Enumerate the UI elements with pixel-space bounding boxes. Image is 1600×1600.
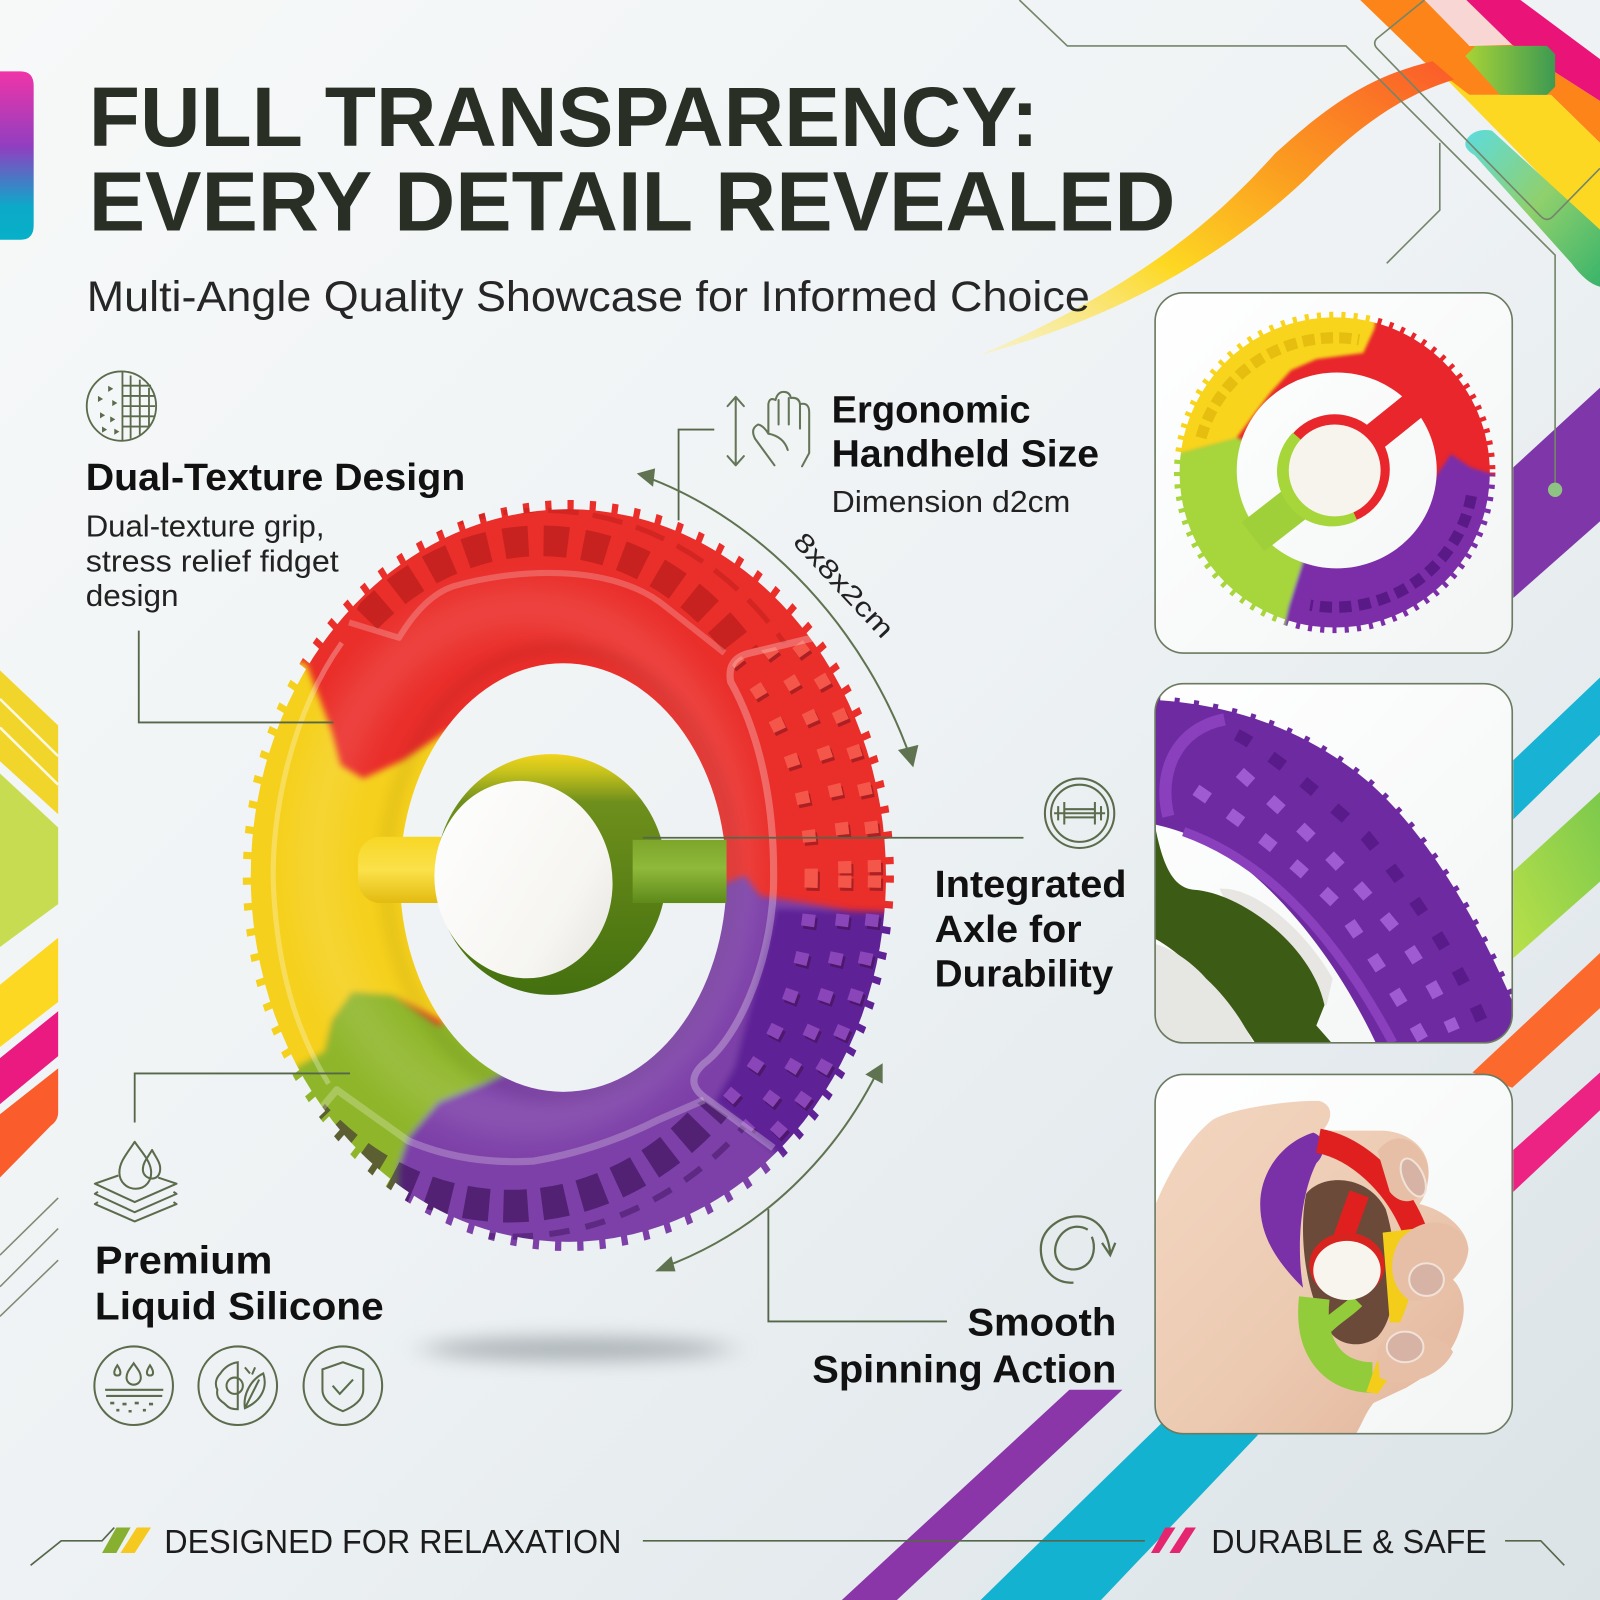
heading bbox=[812, 1302, 1116, 1392]
icon: waterproof bbox=[94, 1346, 173, 1425]
description: stress relief fidget bbox=[86, 544, 339, 578]
dimension text: Dimension d2cm bbox=[832, 485, 1070, 519]
heading: Ergonomic bbox=[832, 388, 1031, 430]
heading: Liquid Silicone bbox=[95, 1285, 384, 1328]
callout: premium liquid silicone bbox=[94, 1142, 384, 1425]
raised rim contours bbox=[273, 573, 813, 1162]
toy: yellow section bbox=[1382, 1228, 1414, 1322]
right tread bumps bbox=[723, 640, 884, 1142]
icon: shield bbox=[304, 1346, 382, 1425]
icon: gear and leaf bbox=[198, 1346, 277, 1425]
heading: Smooth bbox=[967, 1302, 1116, 1345]
panel: tread close-up bbox=[1155, 684, 1520, 1051]
title: FULL TRANSPARENCY: bbox=[89, 69, 1039, 164]
ribbons: left side bbox=[0, 670, 58, 1316]
main product: silicone ring bbox=[242, 500, 894, 1251]
top and bottom windows bbox=[357, 508, 787, 650]
footer: durable and safe bbox=[1151, 1524, 1564, 1565]
heading: Dual-Texture Design bbox=[86, 456, 465, 498]
tread bumps bbox=[1196, 735, 1482, 1041]
panel: toy in hand bbox=[1155, 1074, 1512, 1434]
footer: designed for relaxation bbox=[31, 1524, 621, 1565]
callout: dual texture design bbox=[86, 371, 465, 613]
finger nails bbox=[1400, 1158, 1427, 1198]
heading: Axle for bbox=[935, 908, 1082, 950]
palm hollow bbox=[1303, 1180, 1395, 1344]
ribbons: bottom bbox=[842, 1390, 1258, 1600]
title bbox=[89, 69, 1176, 249]
left gradient tab bbox=[0, 71, 34, 240]
white cap back bbox=[1219, 889, 1333, 1005]
white cap front bbox=[1155, 944, 1253, 1043]
footer: designed for relaxation: DESIGNED FOR RELAXATION bbox=[164, 1524, 621, 1561]
subtitle: Multi-Angle Quality Showcase for Informed Choice bbox=[87, 273, 1090, 321]
description bbox=[86, 510, 339, 613]
ribbons: top right bbox=[1360, 0, 1600, 287]
purple tread bbox=[1155, 700, 1520, 1051]
heading: Spinning Action bbox=[812, 1349, 1116, 1392]
toy: purple section bbox=[1260, 1133, 1324, 1288]
surface shading bbox=[317, 607, 736, 1117]
icon: drops on layers bbox=[95, 1142, 177, 1221]
description: Dual-texture grip, bbox=[86, 510, 324, 544]
small ring bbox=[1174, 312, 1496, 634]
dimension arcs bbox=[637, 468, 918, 1271]
hand bbox=[1156, 1101, 1468, 1434]
icon: dual texture bbox=[87, 371, 156, 441]
heading: Durability bbox=[935, 953, 1113, 995]
icon: axle bbox=[1045, 779, 1114, 848]
circuit lines bbox=[1019, 0, 1600, 497]
heading: Handheld Size bbox=[832, 432, 1099, 474]
heading bbox=[95, 1239, 384, 1328]
heading bbox=[935, 863, 1127, 995]
icon: spin bbox=[1041, 1216, 1115, 1283]
toy: hub bbox=[1309, 1234, 1385, 1289]
panel: full ring view bbox=[1153, 293, 1512, 653]
orange to yellow swoosh bbox=[980, 61, 1454, 355]
toy: red section bbox=[1318, 1141, 1414, 1230]
small ring spokes and hub bbox=[1253, 480, 1327, 537]
description: design bbox=[86, 579, 179, 613]
floor shadow bbox=[423, 1337, 730, 1361]
callout: leader lines bbox=[135, 430, 1023, 1321]
ribbons: right side bbox=[1472, 388, 1600, 1192]
hub back bbox=[436, 754, 666, 995]
icon: hand and height arrow bbox=[728, 392, 809, 466]
heading: Integrated bbox=[935, 863, 1127, 905]
green hub bbox=[1155, 827, 1332, 1043]
callout: ergonomic handheld size bbox=[728, 388, 1099, 519]
footer: durable and safe: DURABLE & SAFE bbox=[1211, 1524, 1487, 1561]
ring body bbox=[242, 500, 894, 1251]
heading bbox=[832, 388, 1099, 474]
toy: green section bbox=[1313, 1298, 1372, 1378]
dimension label: 8x8x2cm bbox=[787, 526, 900, 644]
callout: integrated axle bbox=[935, 779, 1127, 995]
heading: Premium bbox=[95, 1239, 272, 1282]
axle spokes bbox=[358, 837, 460, 903]
callout: smooth spinning action bbox=[812, 1216, 1116, 1392]
fingers bbox=[1378, 1138, 1429, 1201]
hub white cap bbox=[419, 767, 628, 992]
title: EVERY DETAIL REVEALED bbox=[89, 154, 1176, 249]
footer line bbox=[643, 1540, 1145, 1542]
